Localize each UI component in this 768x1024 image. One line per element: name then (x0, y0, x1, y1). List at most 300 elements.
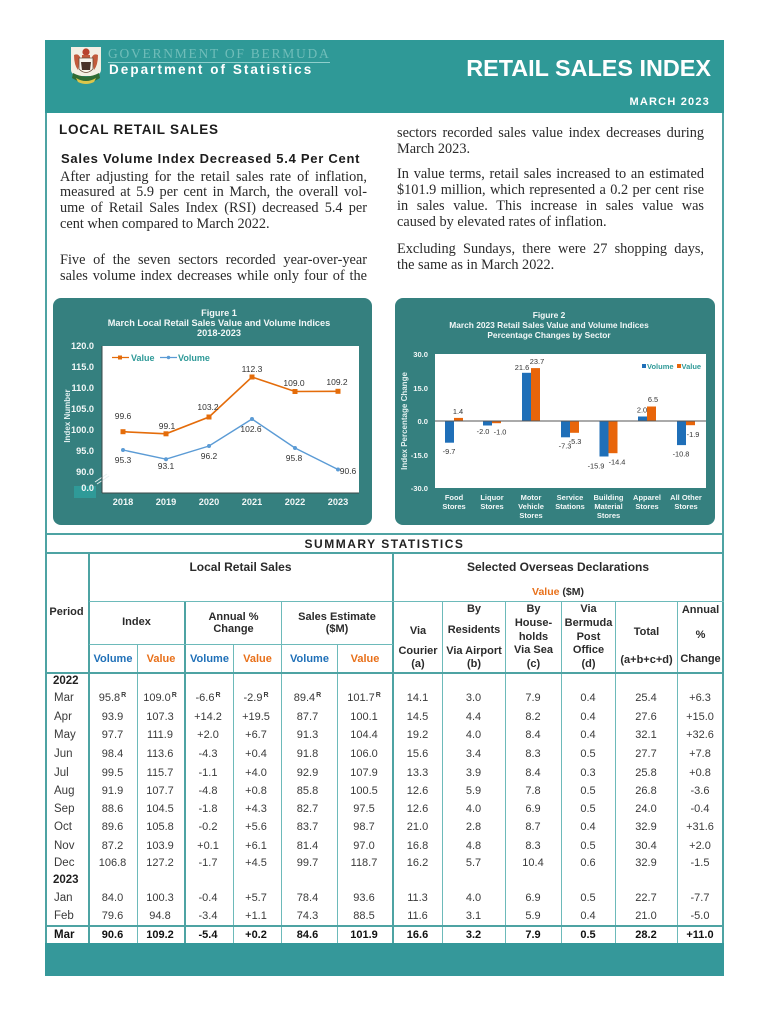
data table: Aug (54, 784, 74, 796)
data table: 104.4 (350, 729, 378, 741)
data table: -6.6R (195, 692, 221, 704)
data table: 78.4 (297, 892, 318, 904)
data table: 104.5 (146, 802, 174, 814)
header: post office: Bermuda (565, 617, 612, 629)
data table: +6.7 (245, 729, 267, 741)
category labels: Vehicle (518, 502, 544, 511)
x axis labels: 2022 (285, 497, 305, 507)
data table: 32.9 (635, 821, 657, 833)
header: courier a (398, 645, 438, 670)
text block: right column: sectors recorded sales value index decreases during (397, 125, 704, 141)
header: post office: Via (580, 603, 597, 615)
data labels (443, 357, 699, 470)
header: volume change: Volume (190, 653, 229, 665)
data labels: 95.8 (286, 453, 303, 463)
header: total (620, 626, 673, 666)
data table: 14.5 (407, 710, 428, 722)
data table: 2.8 (466, 821, 481, 833)
data table: Dec (54, 857, 74, 869)
category labels: Stores (597, 511, 620, 520)
data table: 4.0 (466, 892, 481, 904)
plot area (102, 346, 359, 493)
text block: right column: In value terms, retail sales increased to an estimated (397, 166, 704, 182)
header: by residents via airport (446, 603, 502, 657)
data labels: 99.1 (159, 421, 176, 431)
header: by residents via airport: Residents (448, 624, 500, 636)
x axis labels: 2020 (199, 497, 219, 507)
table top rule (45, 533, 724, 535)
data table: +4.3 (245, 802, 267, 814)
data table: 91.8 (297, 748, 318, 760)
data table: -0.4 (691, 802, 709, 814)
data table: +5.7 (245, 892, 267, 904)
data table: 3.0 (466, 692, 481, 704)
data table: 101.9 (350, 928, 378, 940)
data table: 13.3 (407, 766, 428, 778)
data table: 30.4 (635, 840, 657, 852)
data labels: -15.9 (588, 462, 604, 470)
legend (642, 362, 701, 371)
data table: -5.0 (691, 910, 709, 922)
header: sales estimate (298, 611, 376, 635)
y axis labels: 30.0 (413, 350, 428, 359)
data table: 99.7 (297, 857, 318, 869)
data table: 97.0 (353, 840, 375, 852)
y axis labels: 105.0 (71, 404, 94, 414)
data table: 0.5 (580, 928, 596, 940)
data table: 0.4 (580, 910, 596, 922)
y axis title: Index Percentage Change (400, 372, 409, 470)
text block: right column: the same as in March 2022. (397, 257, 554, 273)
data table: 8.3 (525, 840, 541, 852)
data table: 8.2 (525, 710, 541, 722)
data table: Oct (54, 821, 72, 833)
text block: left column: sales volume index decreases while only four of the (60, 268, 367, 284)
category labels: Stores (635, 502, 659, 511)
data table: 100.3 (146, 892, 174, 904)
data table: 3.4 (466, 748, 481, 760)
header: value change: Value (243, 653, 272, 665)
data table: 16.2 (407, 857, 428, 869)
data table: 0.5 (580, 840, 596, 852)
data labels: 99.6 (115, 411, 132, 421)
header: annual percent change: Annual (682, 604, 719, 616)
legend: Volume (647, 362, 674, 371)
zero label box (74, 483, 96, 498)
data table: 97.7 (102, 729, 123, 741)
text block: right column: $101.9 million, which represented a 0.2 per cent rise (397, 182, 704, 198)
chart title: 2018-2023 (197, 328, 241, 338)
text block: left column: measured at 5.9 per cent in March, the overall vol- (60, 184, 367, 200)
data labels: -2.0 (477, 427, 489, 436)
text block: left column: ume of Retail Sales Index (RSI) decreased 5.4 per (60, 200, 367, 216)
data labels: 6.5 (648, 395, 658, 404)
data table: 8.4 (525, 729, 541, 741)
data table: 25.8 (635, 766, 657, 778)
data labels: 103.2 (197, 402, 219, 412)
data table: 107.9 (350, 766, 378, 778)
header: post office: (d) (581, 658, 596, 670)
frame left edge (45, 113, 47, 943)
data table: 25.4 (635, 692, 657, 704)
x axis labels: 2018 (113, 497, 133, 507)
panel: figure 2 bar chart (395, 298, 715, 525)
header: total: (a+b+c+d) (620, 654, 673, 666)
data table (47, 674, 722, 940)
data table: 8.4 (525, 766, 541, 778)
y axis labels: 95.0 (76, 446, 94, 456)
data table: 32.1 (635, 729, 657, 741)
data table: 5.9 (525, 910, 541, 922)
data labels: 109.0 (283, 378, 305, 388)
icon: Bermuda coat of arms (71, 47, 101, 84)
header: value index: Value (147, 653, 175, 665)
header: sales estimate: ($M) (326, 623, 348, 635)
title: RETAIL SALES INDEX (466, 55, 711, 81)
data table: 32.9 (635, 857, 657, 869)
x axis labels: 2021 (242, 497, 262, 507)
data table: 10.4 (522, 857, 544, 869)
data table: 8.3 (525, 748, 541, 760)
data table: -1.7 (199, 857, 217, 869)
data table: 84.6 (297, 928, 318, 940)
header: post office: Office (573, 644, 604, 656)
data table: 28.2 (635, 928, 657, 940)
data table: 27.7 (635, 748, 657, 760)
data table: Sep (54, 802, 74, 814)
text block: right column: March 2023. (397, 141, 470, 157)
data table: 83.7 (297, 821, 318, 833)
header: period: Period (49, 606, 84, 618)
data table: 4.8 (466, 840, 481, 852)
text block: left column: cent when compared to March 2022. (60, 216, 270, 232)
data table: +0.8 (689, 766, 711, 778)
y axis labels: 15.0 (413, 384, 428, 393)
data table: +5.6 (245, 821, 267, 833)
data table: 0.5 (580, 802, 596, 814)
header: local retail sales: Local Retail Sales (189, 560, 292, 574)
heading: local retail sales: LOCAL RETAIL SALES (59, 122, 219, 137)
data table: Jul (54, 766, 69, 778)
header: volume estimate: Volume (290, 653, 329, 665)
subheading: sales volume index: Sales Volume Index Decreased 5.4 Per Cent (61, 151, 360, 166)
date: MARCH 2023 (630, 96, 710, 108)
data table: Mar (54, 692, 74, 704)
header: value estimate: Value (351, 653, 379, 665)
volume bars (445, 373, 686, 456)
header: selected overseas declarations: Selected Overseas Declarations (467, 560, 649, 574)
text block: left column: Five of the seven sectors recorded year-over-year (60, 252, 367, 268)
data table: 5.9 (466, 784, 481, 796)
data table: -1.5 (691, 857, 709, 869)
data table: 92.9 (297, 766, 318, 778)
data table: +6.1 (245, 840, 267, 852)
text block: right column: Excluding Sundays, there were 27 shopping days, (397, 241, 704, 257)
data table: 100.5 (350, 784, 378, 796)
data table: -1.8 (199, 802, 217, 814)
category labels: Stations (555, 502, 585, 511)
header: courier a: (a) (411, 658, 425, 670)
data table: 99.5 (102, 766, 123, 778)
organisation name: Government of Bermuda: GOVERNMENT OF BERMUDA (108, 46, 331, 61)
category labels: Stores (674, 502, 698, 511)
data table: +11.0 (686, 928, 714, 940)
chart title (449, 310, 649, 340)
data table: +32.6 (686, 729, 714, 741)
data labels: 109.2 (326, 377, 348, 387)
data table: +7.8 (689, 748, 711, 760)
data table: 89.6 (102, 821, 123, 833)
data table: 14.1 (407, 692, 428, 704)
data table: 26.8 (635, 784, 657, 796)
data table: 115.7 (147, 766, 173, 778)
data table: 93.9 (102, 710, 123, 722)
header: households via sea: holds (519, 630, 548, 642)
data table: 4.0 (466, 802, 481, 814)
data table: 98.7 (353, 821, 375, 833)
category labels: All Other (670, 493, 702, 502)
data table: 109.0R (143, 692, 177, 704)
legend (112, 353, 210, 363)
data table: 7.9 (525, 692, 541, 704)
data table: +0.2 (245, 928, 267, 940)
data labels: 21.6 (515, 363, 529, 372)
header: b label: (b) (467, 658, 481, 670)
data table: -3.6 (691, 784, 709, 796)
y axis labels: -30.0 (411, 484, 428, 493)
data table: 12.6 (407, 802, 428, 814)
category labels: Food (445, 493, 464, 502)
rule under organisation name (108, 62, 330, 63)
data table: 87.2 (102, 840, 123, 852)
header: post office: Post (577, 630, 600, 642)
axis break mark (95, 474, 109, 484)
text block: left column (60, 169, 367, 284)
data table: 0.5 (580, 892, 596, 904)
data table: -5.4 (199, 928, 217, 940)
data table: -3.4 (199, 910, 217, 922)
data table: +4.5 (245, 857, 267, 869)
y axis labels: 90.0 (76, 467, 94, 477)
y axis labels: 0.0 (417, 417, 428, 426)
data table: -1.1 (199, 766, 217, 778)
category labels: Service (557, 493, 583, 502)
category labels: Material (594, 502, 623, 511)
data table: 97.5 (353, 802, 375, 814)
data table: 0.3 (580, 766, 596, 778)
plot area (435, 354, 706, 488)
data table: 127.2 (146, 857, 174, 869)
table heading: SUMMARY STATISTICS (305, 537, 464, 551)
header: annual percent change: Change (680, 653, 721, 665)
data labels: -9.7 (443, 447, 455, 456)
chart title: March Local Retail Sales Value and Volume Indices (108, 318, 330, 328)
data table: 91.9 (102, 784, 123, 796)
value series (120, 374, 340, 436)
data labels: -7.3 (559, 442, 571, 450)
text block: right column (397, 125, 704, 273)
data labels: 102.6 (240, 424, 262, 434)
x axis (102, 346, 359, 493)
header: via courier: Via (410, 625, 426, 637)
header: annual change: Change (213, 623, 254, 635)
data table: 21.0 (407, 821, 428, 833)
data table: 11.3 (407, 892, 428, 904)
panel: summary statistics table (47, 533, 724, 943)
header: households via sea: House- (515, 617, 552, 629)
frame right edge (722, 113, 724, 943)
y axis labels: 110.0 (72, 383, 94, 393)
header: households via sea: By (526, 603, 541, 615)
chart title (108, 308, 330, 338)
text block: right column: caused by elevated rates of inflation. (397, 214, 607, 230)
data table: 111.9 (147, 729, 173, 741)
data table: 93.6 (353, 892, 375, 904)
header: sales estimate: Sales Estimate (298, 611, 376, 623)
header: by residents via airport: By (467, 603, 481, 615)
data table: 82.7 (297, 802, 318, 814)
data table: 100.1 (350, 710, 378, 722)
footer band (45, 943, 724, 976)
category labels: Motor (521, 493, 541, 502)
data table: Nov (54, 840, 74, 852)
header: volume index: Volume (94, 653, 132, 665)
data labels: -1.0 (494, 428, 506, 436)
header: post office (565, 603, 612, 670)
data labels: 96.2 (201, 451, 218, 461)
data table: 2022 (53, 674, 79, 686)
data table: 4.4 (466, 710, 481, 722)
data table: 118.7 (351, 857, 377, 869)
volume series (121, 417, 340, 472)
data table: -4.8 (199, 784, 217, 796)
data labels: -1.9 (687, 430, 699, 439)
data table: -4.3 (199, 748, 217, 760)
data labels: -14.4 (609, 458, 625, 466)
data table: +0.8 (245, 784, 267, 796)
data labels (115, 364, 357, 476)
data table: 0.4 (580, 821, 596, 833)
data table: 12.6 (407, 784, 428, 796)
y axis title: Index Number (63, 389, 72, 443)
header: courier a: Courier (398, 645, 438, 657)
category labels: Stores (480, 502, 504, 511)
data table: 89.4R (294, 692, 321, 704)
header: annual change (208, 611, 259, 635)
data labels: 90.6 (340, 466, 357, 476)
chart title: Figure 1 (201, 308, 237, 318)
data table: 91.3 (297, 729, 318, 741)
data table: May (54, 729, 76, 741)
data table: 0.4 (580, 692, 596, 704)
data table: 81.4 (297, 840, 318, 852)
data labels: -5.3 (569, 437, 581, 446)
data table: 107.3 (146, 710, 174, 722)
header: by residents via airport: Via Airport (446, 645, 502, 657)
data table: 88.5 (353, 910, 375, 922)
data table: 98.4 (102, 748, 123, 760)
x axis labels: 2023 (328, 497, 348, 507)
data table: 107.7 (146, 784, 174, 796)
category labels: Liquor (480, 493, 504, 502)
y axis labels (411, 350, 428, 493)
data table: Jun (54, 748, 73, 760)
value bars (454, 368, 695, 453)
header: households via sea (514, 603, 554, 670)
y axis labels: -15.0 (411, 451, 428, 460)
data labels: 93.1 (158, 461, 175, 471)
header band (45, 40, 724, 113)
category labels: Apparel (633, 493, 661, 502)
data table: 6.9 (525, 892, 541, 904)
chart title: Percentage Changes by Sector (487, 330, 611, 340)
x axis labels (113, 497, 348, 507)
data table: 0.4 (580, 729, 596, 741)
data table: 27.6 (635, 710, 657, 722)
chart title: Figure 2 (533, 310, 566, 320)
data table: 0.5 (580, 784, 596, 796)
data table: 0.5 (580, 748, 596, 760)
data labels: 112.3 (242, 364, 263, 374)
data labels: 2.0 (637, 406, 647, 414)
data table: +2.0 (689, 840, 711, 852)
chart title: March 2023 Retail Sales Value and Volume Indices (449, 320, 649, 330)
data labels: 1.4 (453, 407, 463, 416)
header: households via sea: Via Sea (514, 644, 553, 656)
data table: 106.8 (99, 857, 126, 869)
header: index: Index (122, 616, 151, 628)
data table: 0.6 (580, 857, 596, 869)
data table: 3.9 (466, 766, 481, 778)
data table: 105.8 (146, 821, 174, 833)
data table: 74.3 (297, 910, 318, 922)
data table: 4.0 (466, 729, 481, 741)
data table: +6.3 (689, 692, 711, 704)
category labels: Stores (519, 511, 543, 520)
data table: 79.6 (102, 910, 123, 922)
header: value unit: Value ($M) (532, 586, 584, 598)
data table: +15.0 (686, 710, 714, 722)
data table: 103.9 (146, 840, 174, 852)
data table: 95.8R (99, 692, 126, 704)
data labels: 23.7 (530, 357, 544, 366)
data table: 24.0 (635, 802, 657, 814)
header: total: Total (634, 626, 659, 638)
y axis labels: 100.0 (71, 425, 94, 435)
data table: 106.0 (350, 748, 378, 760)
data table: 94.8 (149, 910, 171, 922)
header: households via sea: (c) (527, 658, 540, 670)
data table: +4.0 (245, 766, 267, 778)
y axis labels: 115.0 (72, 362, 94, 372)
data table: 87.7 (297, 710, 318, 722)
y axis labels (71, 341, 94, 477)
category labels (442, 493, 702, 520)
data labels: 95.3 (115, 455, 132, 465)
data table: Mar (54, 928, 74, 940)
data table: +0.1 (197, 840, 219, 852)
data table: -0.4 (199, 892, 217, 904)
data table: 2023 (53, 874, 79, 886)
data table: +31.6 (686, 821, 714, 833)
data table: 8.7 (525, 821, 541, 833)
data table: 16.8 (407, 840, 428, 852)
data table: 22.7 (635, 892, 657, 904)
header: annual percent change: % (696, 628, 705, 640)
y axis labels: 120.0 (71, 341, 94, 351)
data table: 90.6 (102, 928, 123, 940)
header: annual change: Annual % (208, 611, 259, 623)
